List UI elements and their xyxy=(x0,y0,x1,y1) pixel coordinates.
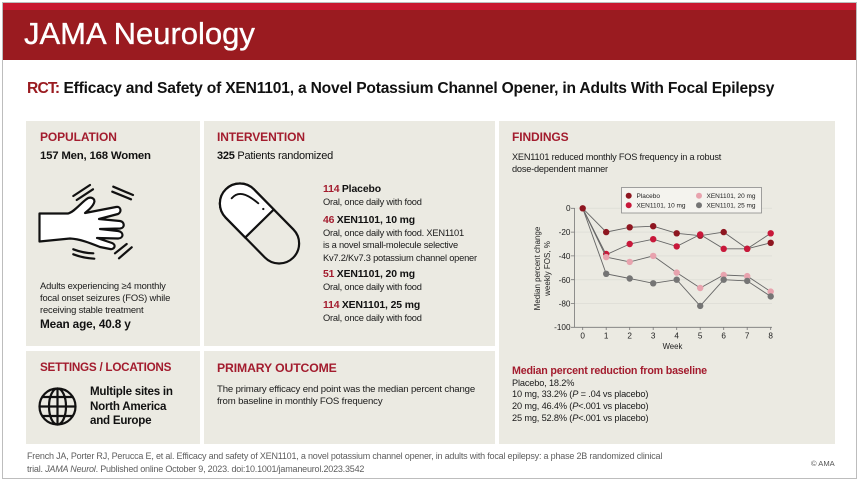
x axis labels: 3 xyxy=(651,332,656,340)
patients randomized: 325 Patients randomized xyxy=(217,150,333,162)
population description xyxy=(40,280,170,315)
citation xyxy=(27,451,662,474)
y axis labels: -100 xyxy=(554,323,571,332)
arm: XEN1101 20 mg: Oral, once daily with food xyxy=(323,282,422,292)
x axis labels: 1 xyxy=(604,332,609,340)
accent strip xyxy=(3,3,856,10)
reduction values: 10 mg, 33.2% (P = .04 vs placebo) xyxy=(512,389,648,399)
primary outcome description: The primary efficacy end point was the median percent change xyxy=(217,384,475,395)
population description: Adults experiencing ≥4 monthly xyxy=(40,280,166,290)
arm: XEN1101 10 mg: Oral, once daily with food. XEN1101 xyxy=(323,228,464,238)
series: placebo xyxy=(583,208,774,252)
reduction values xyxy=(512,378,648,423)
panel: population xyxy=(26,121,200,346)
arm: XEN1101 10 mg: is a novel small-molecule selective xyxy=(323,240,458,250)
panel: intervention xyxy=(204,121,495,346)
citation: French JA, Porter RJ, Perucca E, et al. Efficacy and safety of XEN1101, a novel potassium channel opener, in adults with focal epilepsy: a phase 2B randomized clinical xyxy=(27,451,662,461)
axes xyxy=(571,208,772,330)
x axis title: Week xyxy=(663,342,682,351)
chart legend: Placebo xyxy=(636,193,660,200)
arm: XEN1101 25 mg xyxy=(323,300,422,323)
settings description: Multiple sites in xyxy=(90,385,173,398)
y axis title: Median percent change xyxy=(533,226,542,310)
series: XEN1101 20 mg xyxy=(583,208,774,295)
arm: placebo: Oral, once daily with food xyxy=(323,197,422,207)
findings summary: dose-dependent manner xyxy=(512,164,608,174)
intervention heading: INTERVENTION xyxy=(217,130,305,144)
y axis title: weekly FOS, % xyxy=(543,241,552,297)
panel: primary outcome xyxy=(204,351,495,444)
settings heading: SETTINGS / LOCATIONS xyxy=(40,361,171,374)
arm: placebo: 114 Placebo xyxy=(323,184,381,194)
settings description xyxy=(90,385,173,427)
population description: receiving stable treatment xyxy=(40,304,143,315)
x axis labels xyxy=(580,332,773,340)
chart legend: XEN1101, 20 mg xyxy=(706,193,756,200)
arm: XEN1101 10 mg: 46 XEN1101, 10 mg xyxy=(323,214,415,226)
x axis labels: 6 xyxy=(721,332,726,340)
panel: settings and locations xyxy=(26,351,200,444)
title: RCT: Efficacy and Safety of XEN1101, a Novel Potassium Channel Opener, in Adults With Focal Epilepsy xyxy=(27,80,774,97)
findings summary: XEN1101 reduced monthly FOS frequency in a robust xyxy=(512,152,721,162)
arm: XEN1101 25 mg: 114 XEN1101, 25 mg xyxy=(323,300,420,311)
reduction heading: Median percent reduction from baseline xyxy=(512,365,707,377)
population counts: 157 Men, 168 Women xyxy=(40,150,151,162)
header banner xyxy=(3,3,856,60)
primary outcome description: from baseline in monthly FOS frequency xyxy=(217,396,382,407)
primary outcome heading: PRIMARY OUTCOME xyxy=(217,361,337,375)
gridlines xyxy=(574,208,772,304)
y axis labels: -40 xyxy=(559,252,571,261)
population heading: POPULATION xyxy=(40,130,117,144)
arm: XEN1101 10 mg xyxy=(323,214,477,263)
primary outcome description xyxy=(217,384,475,407)
panel: findings xyxy=(499,121,835,444)
icon: capsule xyxy=(218,182,300,265)
y axis labels: -80 xyxy=(559,300,571,308)
y axis labels: -20 xyxy=(559,228,571,237)
series: XEN1101 10 mg xyxy=(583,208,774,257)
settings description: and Europe xyxy=(90,414,151,427)
population description: focal onset seizures (FOS) while xyxy=(40,292,170,303)
icon: shaking hand xyxy=(38,184,134,260)
arm: placebo xyxy=(323,184,422,207)
y axis labels: 0 xyxy=(566,204,571,213)
arm: XEN1101 10 mg: Kv7.2/Kv7.3 potassium channel opener xyxy=(323,253,477,263)
copyright: © AMA xyxy=(811,459,835,468)
x axis labels: 5 xyxy=(698,332,703,340)
x axis labels: 7 xyxy=(745,332,750,340)
journal name: JAMA Neurology xyxy=(24,16,255,51)
y axis labels: -60 xyxy=(559,276,571,285)
icon: globe xyxy=(38,387,77,426)
chart legend xyxy=(622,188,762,213)
settings description: North America xyxy=(90,400,166,412)
mean age: Mean age, 40.8 y xyxy=(40,316,131,330)
arm: XEN1101 20 mg xyxy=(323,269,422,292)
reduction values: Placebo, 18.2% xyxy=(512,378,574,388)
findings heading: FINDINGS xyxy=(512,130,569,144)
x axis labels: 8 xyxy=(768,332,773,340)
baseline marker xyxy=(580,205,586,212)
arm: XEN1101 20 mg: 51 XEN1101, 20 mg xyxy=(323,269,415,280)
arm: XEN1101 25 mg: Oral, once daily with food xyxy=(323,313,422,323)
x axis labels: 0 xyxy=(580,332,585,340)
series: XEN1101 25 mg xyxy=(583,208,774,309)
x axis labels: 2 xyxy=(627,332,632,340)
chart legend: XEN1101, 10 mg xyxy=(636,203,686,210)
chart legend: XEN1101, 25 mg xyxy=(706,203,756,210)
y axis labels xyxy=(554,204,571,332)
reduction values: 25 mg, 52.8% (P<.001 vs placebo) xyxy=(512,413,648,423)
citation: trial. JAMA Neurol. Published online October 9, 2023. doi:10.1001/jamaneurol.2023.3542 xyxy=(27,464,364,474)
reduction values: 20 mg, 46.4% (P<.001 vs placebo) xyxy=(512,401,648,411)
x axis labels: 4 xyxy=(674,332,679,340)
findings summary xyxy=(512,152,722,174)
